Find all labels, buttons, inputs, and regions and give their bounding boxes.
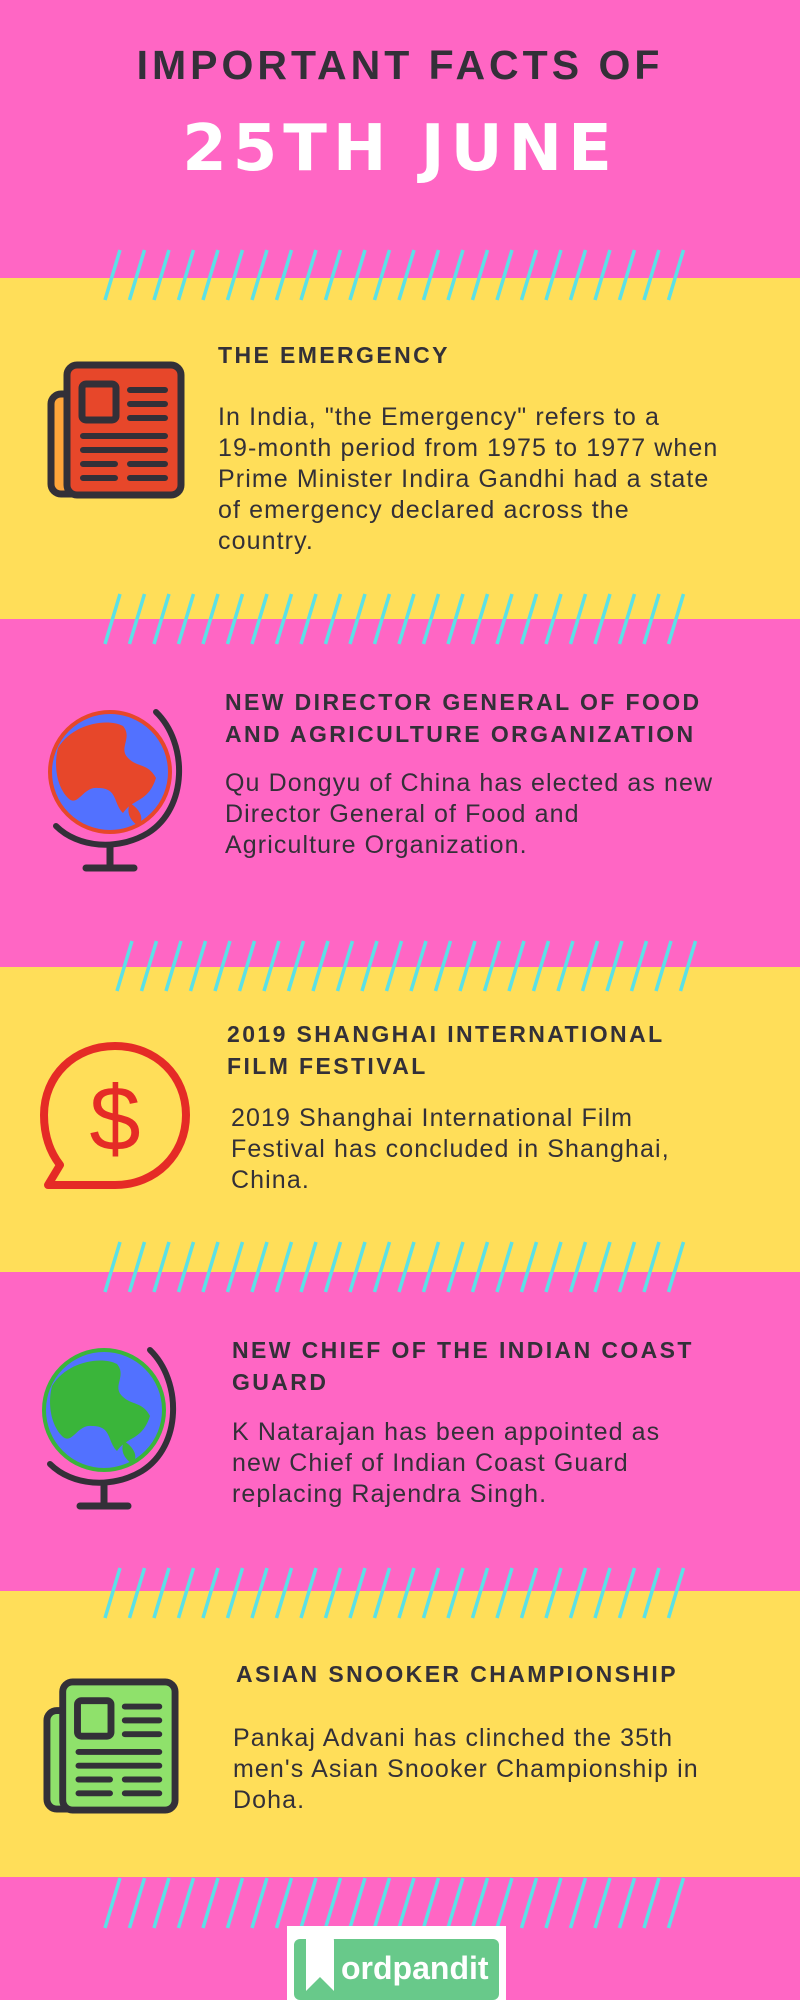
heading: AND AGRICULTURE ORGANIZATION	[225, 721, 696, 747]
body text	[231, 1104, 670, 1194]
icon: globe red	[48, 709, 182, 872]
body text: Festival has concluded in Shanghai,	[231, 1135, 670, 1163]
panel: Asian snooker	[44, 1661, 699, 1814]
heading: GUARD	[232, 1369, 328, 1395]
heading	[225, 689, 702, 747]
panel: Indian coast guard	[42, 1337, 694, 1510]
stripes divider 3	[115, 940, 698, 992]
body text: K Natarajan has been appointed as	[232, 1418, 660, 1446]
icon: red newspaper	[48, 362, 184, 498]
body text: replacing Rajendra Singh.	[232, 1480, 547, 1508]
icon: globe green	[42, 1347, 176, 1510]
panel: the emergency	[48, 342, 718, 555]
body text: In India, "the Emergency" refers to a	[218, 403, 660, 431]
icon: green newspaper	[44, 1678, 178, 1814]
panel: Shanghai film festival	[40, 1021, 670, 1194]
stripes divider 6	[103, 1878, 686, 1928]
heading: FILM FESTIVAL	[227, 1053, 428, 1079]
heading: NEW CHIEF OF THE INDIAN COAST	[232, 1337, 694, 1363]
stripes divider 4	[103, 1242, 686, 1292]
body text: Agriculture Organization.	[225, 831, 528, 859]
stripes divider 1	[103, 250, 686, 300]
stripes divider 5	[103, 1568, 686, 1618]
body text: of emergency declared across the	[218, 496, 630, 524]
icon: dollar speech bubble: $	[89, 1068, 141, 1170]
panel: FAO director general	[48, 689, 713, 872]
stripes divider 2	[103, 594, 686, 644]
logo: wordpandit: ordpandit	[341, 1950, 489, 1986]
heading	[232, 1337, 694, 1395]
body text: 2019 Shanghai International Film	[231, 1104, 633, 1132]
body text: new Chief of Indian Coast Guard	[232, 1449, 629, 1477]
body text	[233, 1724, 699, 1814]
body text: men's Asian Snooker Championship in	[233, 1755, 699, 1783]
title: IMPORTANT FACTS OF	[137, 42, 663, 88]
body text: Doha.	[233, 1786, 305, 1814]
logo: wordpandit	[287, 1926, 506, 2000]
body text: Pankaj Advani has clinched the 35th	[233, 1724, 673, 1752]
body text: Qu Dongyu of China has elected as new	[225, 769, 713, 797]
heading	[227, 1021, 665, 1079]
body text	[218, 403, 718, 555]
body text	[232, 1418, 660, 1508]
heading: THE EMERGENCY	[218, 342, 450, 368]
body text: Prime Minister Indira Gandhi had a state	[218, 465, 709, 493]
body text: China.	[231, 1166, 310, 1194]
subtitle date: 25TH JUNE	[182, 112, 618, 186]
body text	[225, 769, 713, 859]
body text: 19-month period from 1975 to 1977 when	[218, 434, 718, 462]
heading: NEW DIRECTOR GENERAL OF FOOD	[225, 689, 702, 715]
heading: ASIAN SNOOKER CHAMPIONSHIP	[236, 1661, 678, 1687]
icon: dollar speech bubble	[40, 1042, 190, 1189]
heading: 2019 SHANGHAI INTERNATIONAL	[227, 1021, 665, 1047]
body text: country.	[218, 527, 314, 555]
body text: Director General of Food and	[225, 800, 580, 828]
